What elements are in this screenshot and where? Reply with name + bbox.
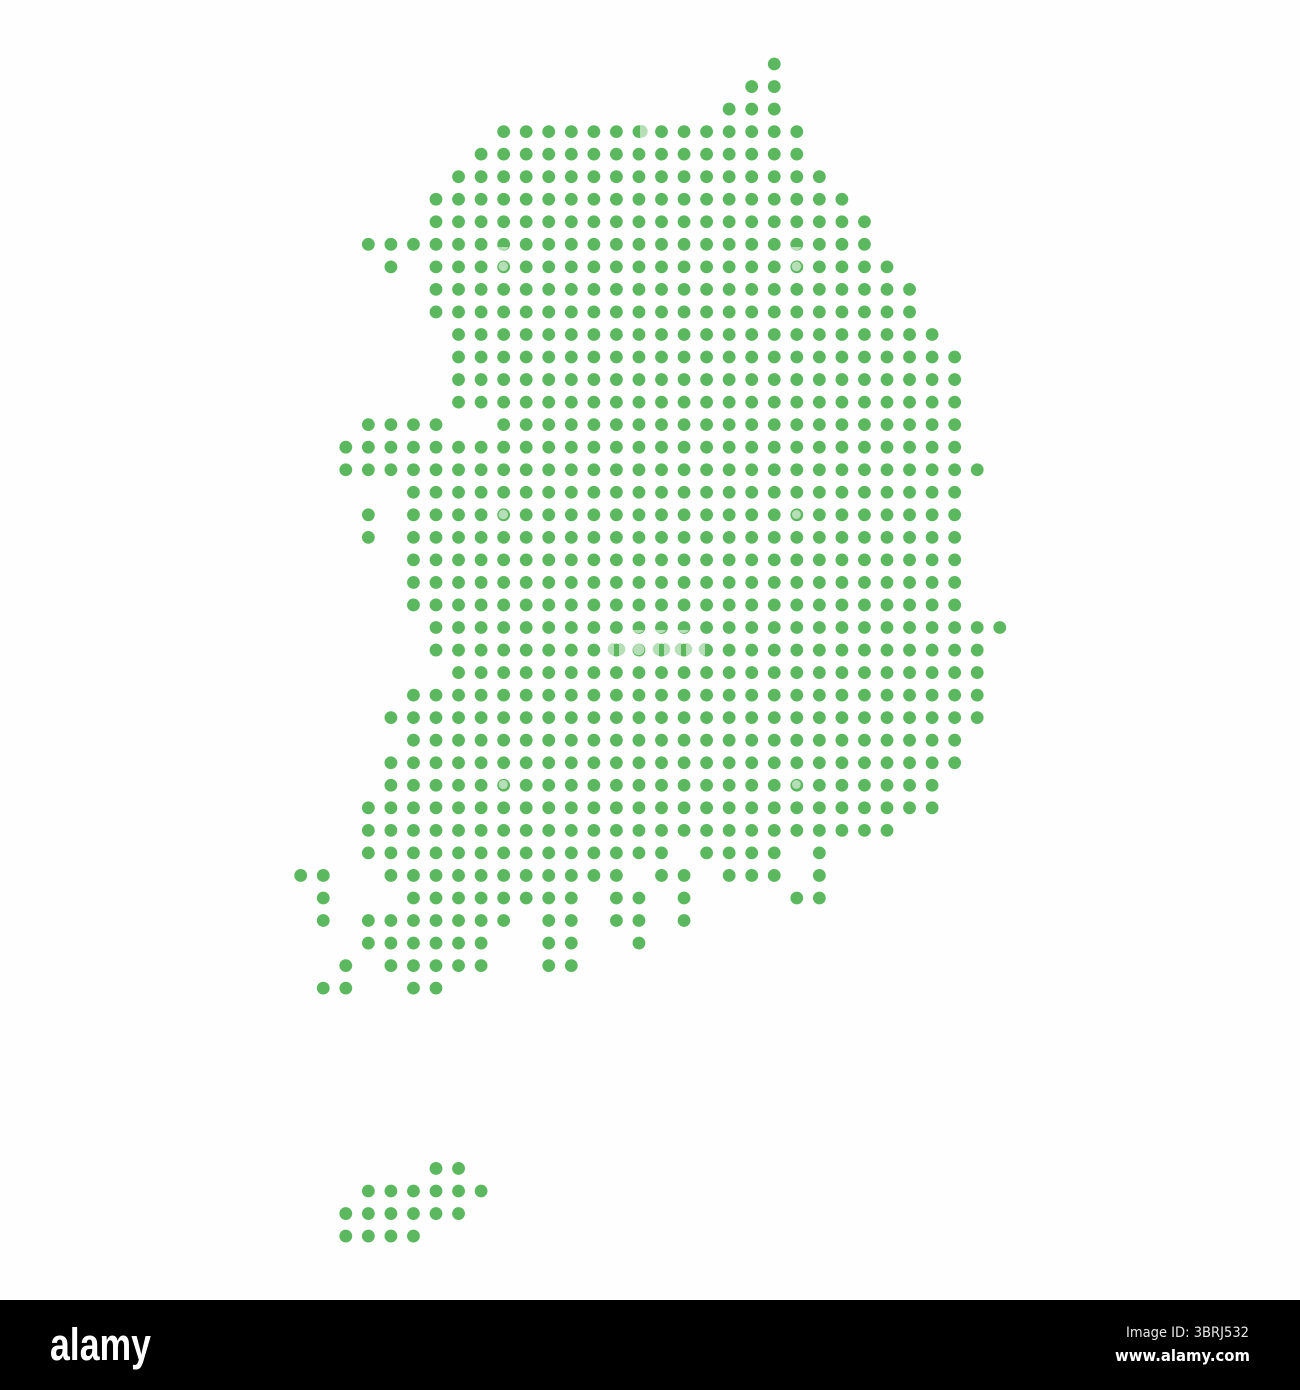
image id: Image ID: 3BRJ532: [1126, 1325, 1249, 1341]
logo wordmark: alamy: [50, 1319, 151, 1370]
footer bar: [0, 1300, 1300, 1390]
website: www.alamy.com: [1115, 1346, 1250, 1365]
Jeju island dots: [346, 1168, 482, 1236]
footer background: [0, 1300, 1300, 1390]
mainland dots: [301, 64, 1000, 988]
faint watermark traces over dots: [498, 125, 802, 789]
dot map: [301, 64, 1000, 1236]
